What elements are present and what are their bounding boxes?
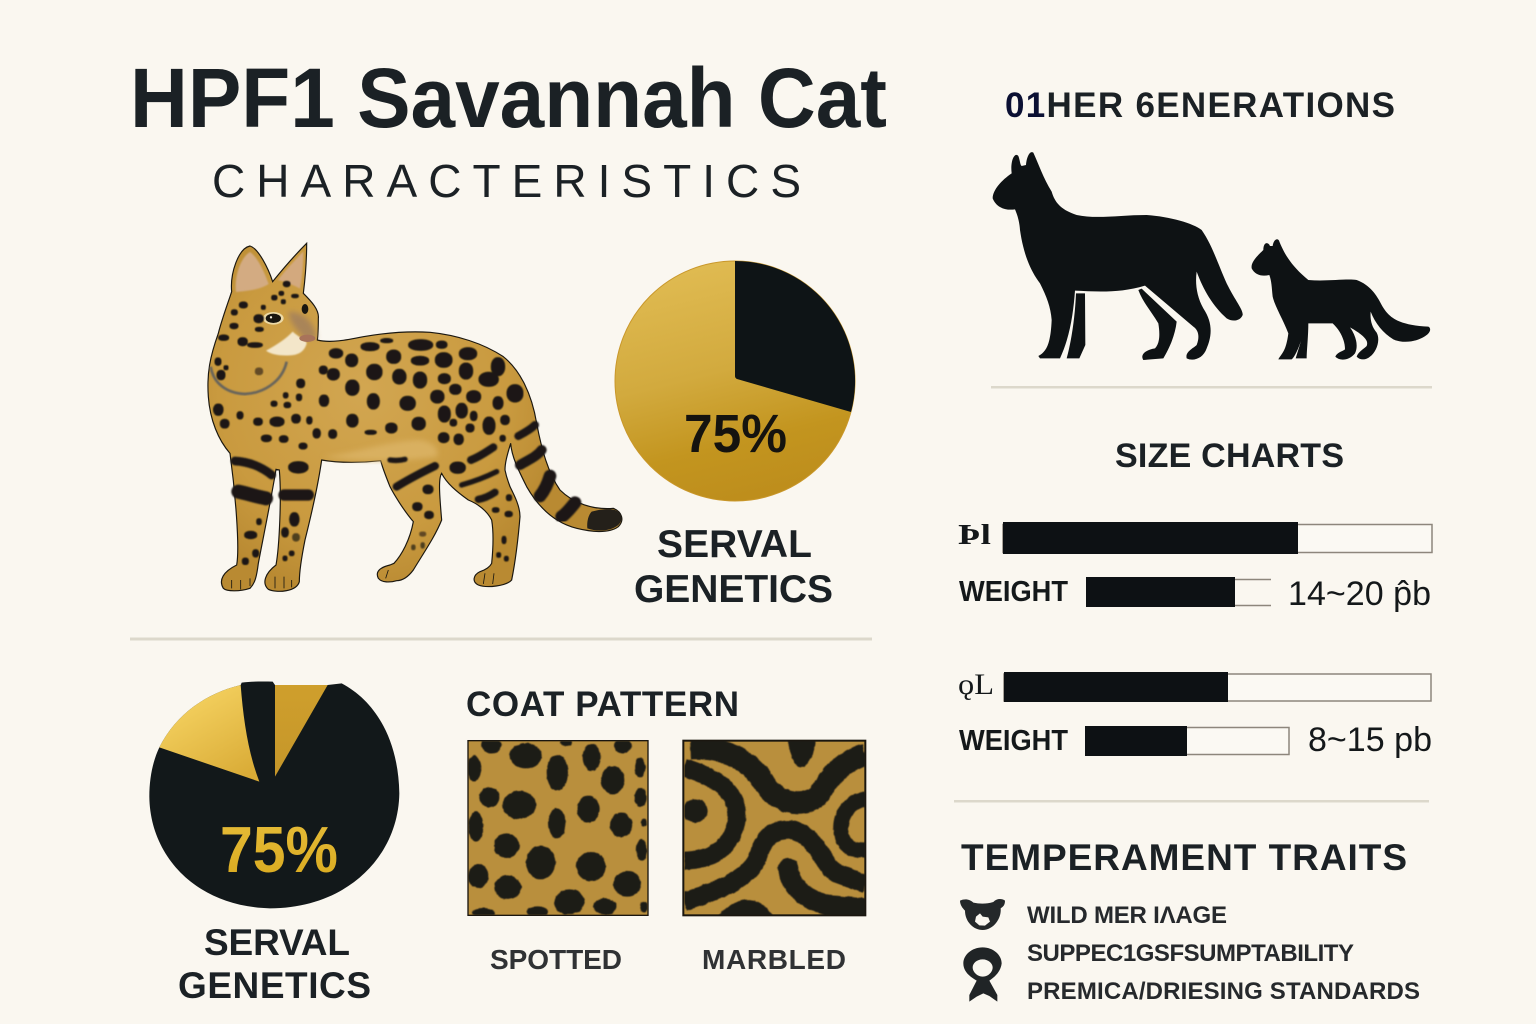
01 weight bar bbox=[1085, 726, 1289, 756]
yellow slice bbox=[159, 685, 259, 782]
collar line bbox=[211, 362, 287, 394]
pie chart label bbox=[634, 523, 833, 611]
gold slice bbox=[275, 685, 328, 777]
01 bar bbox=[1004, 672, 1228, 702]
swatch: marbled bbox=[682, 740, 866, 917]
lower pie label: SERVAL bbox=[204, 922, 350, 963]
leg and tail stripes bbox=[235, 425, 575, 517]
F1 track bbox=[1003, 524, 1432, 552]
F1 weight bar bbox=[1086, 577, 1271, 607]
black disc bbox=[149, 681, 399, 908]
swatch: spotted bbox=[467, 737, 648, 917]
inner ears bbox=[236, 251, 303, 292]
icon: cat face bbox=[960, 899, 1005, 930]
belly highlight bbox=[323, 440, 438, 460]
F1 weight value: 14~20 p̂b bbox=[1288, 575, 1431, 613]
tail tip bbox=[587, 509, 622, 531]
01 track bbox=[1004, 674, 1431, 701]
swatch labels: SPOTTED bbox=[490, 944, 622, 975]
heading: coat pattern: COAT PATTERN bbox=[466, 685, 739, 724]
01 weight label: WEIGHT bbox=[959, 725, 1068, 757]
subtitle: CHARACTERISTICS bbox=[212, 155, 801, 207]
trait list: SUPPEC1GSFSUMPTABILITY bbox=[1027, 940, 1354, 967]
F1 weight label: WEIGHT bbox=[959, 576, 1068, 608]
trait list: PREMICA/DRIESING STANDARDS bbox=[1027, 978, 1420, 1005]
paw toes bbox=[232, 570, 494, 589]
muzzle bbox=[263, 304, 317, 356]
lower pie label bbox=[178, 922, 371, 1006]
silhouettes: large and small cat bbox=[993, 152, 1430, 360]
gold disc bbox=[615, 261, 855, 501]
lower pie label: GENETICS bbox=[178, 965, 371, 1006]
pie chart: lower 75% black bbox=[149, 681, 399, 908]
cat body bbox=[208, 243, 622, 591]
percentage: 75% bbox=[684, 404, 787, 464]
far hind leg bbox=[1138, 289, 1177, 360]
swatch labels bbox=[490, 944, 846, 975]
01 weight value: 8~15 pb bbox=[1308, 721, 1432, 759]
01 label: ǫL bbox=[958, 668, 994, 701]
coat spots bbox=[214, 281, 523, 565]
icon: ribbon bbox=[963, 947, 1002, 1002]
size chart: F1 bbox=[958, 520, 1432, 613]
silhouette: large cat bbox=[993, 152, 1243, 360]
swatch labels: MARBLED bbox=[702, 944, 846, 975]
trait list bbox=[1027, 902, 1420, 1005]
title: HPF1 Savannah Cat bbox=[130, 51, 887, 145]
heading: other generations: 01HER 6ENERATIONS bbox=[1005, 86, 1395, 125]
trait list: WILD MER ΙΛAGE bbox=[1027, 902, 1227, 929]
silhouette: small cat bbox=[1252, 239, 1430, 360]
swatches: coat patterns bbox=[467, 737, 866, 917]
heading: size charts: SIZE CHARTS bbox=[1115, 437, 1344, 475]
pie chart label: GENETICS bbox=[634, 568, 833, 611]
black slice bbox=[735, 261, 855, 412]
heading: temperament traits: TEMPERAMENT TRAITS bbox=[961, 837, 1407, 878]
F1 label: Þl bbox=[958, 520, 991, 551]
percentage: 75% bbox=[220, 813, 338, 886]
F1 bar bbox=[1003, 522, 1298, 554]
size chart: 01 bbox=[958, 668, 1432, 759]
pie chart: serval genetics, gold with black slice bbox=[615, 261, 855, 501]
far front leg bbox=[1067, 293, 1085, 358]
illustration: spotted savannah cat bbox=[208, 243, 622, 591]
pie chart label: SERVAL bbox=[657, 523, 812, 566]
